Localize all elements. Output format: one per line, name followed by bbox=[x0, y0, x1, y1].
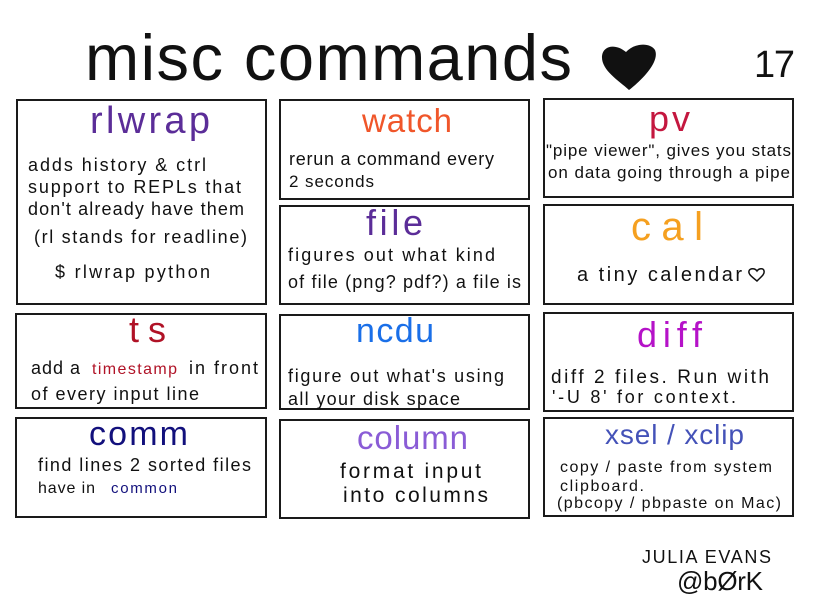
text: comm description: have in bbox=[38, 480, 95, 497]
text: xsel description bbox=[557, 459, 781, 512]
panel: watch bbox=[280, 100, 529, 199]
credit: author: JULIA EVANS bbox=[642, 547, 771, 567]
heading: ts: ts bbox=[129, 309, 166, 350]
title: misc commands bbox=[85, 21, 572, 94]
heading: column: column bbox=[357, 419, 468, 456]
panel: pv bbox=[544, 98, 793, 197]
panel: diff bbox=[544, 313, 793, 411]
credit: author bbox=[642, 547, 771, 594]
heading: xsel / xclip: xsel / xclip bbox=[605, 419, 744, 450]
text: ncdu description: figure out what's using bbox=[288, 366, 504, 386]
heading: rlwrap: rlwrap bbox=[90, 100, 210, 142]
text: ts description: in front bbox=[189, 358, 258, 378]
text: comm description bbox=[38, 455, 251, 497]
text: ncdu description bbox=[288, 366, 504, 409]
text: diff description: '-U 8' for context. bbox=[552, 387, 736, 407]
text: file description bbox=[288, 245, 521, 292]
text: ts description: add a bbox=[31, 358, 81, 378]
panel: column bbox=[280, 419, 529, 518]
heading: watch: watch bbox=[361, 102, 452, 139]
text: cal description: a tiny calendar bbox=[577, 264, 742, 286]
text: watch description: rerun a command every bbox=[289, 149, 494, 169]
text: watch description bbox=[289, 149, 494, 191]
page number: 17 bbox=[754, 44, 795, 86]
panel: file bbox=[280, 202, 529, 304]
icon: small heart bbox=[749, 269, 764, 281]
panel: cal bbox=[544, 205, 793, 304]
text: pv description bbox=[546, 141, 791, 182]
text: file description: figures out what kind bbox=[288, 245, 495, 265]
panel: rlwrap bbox=[17, 100, 266, 304]
text: rlwrap description bbox=[28, 155, 247, 282]
heading: ncdu: ncdu bbox=[356, 312, 434, 350]
text: diff description bbox=[551, 367, 769, 407]
text: xsel description: copy / paste from system bbox=[560, 459, 772, 476]
heading: comm: comm bbox=[89, 415, 188, 453]
heading: pv: pv bbox=[649, 98, 690, 139]
text: file description: of file (png? pdf?) a file is bbox=[288, 272, 521, 292]
text: rlwrap description: (rl stands for readline) bbox=[34, 227, 247, 247]
text: column description: into columns bbox=[343, 484, 488, 507]
panel: ts bbox=[16, 309, 266, 408]
text: rlwrap description: don't already have them bbox=[28, 199, 244, 219]
text: ts description: of every input line bbox=[31, 384, 199, 404]
text: watch description: 2 seconds bbox=[289, 172, 374, 191]
text: comm description: find lines 2 sorted files bbox=[38, 455, 251, 475]
heading: file: file bbox=[366, 202, 423, 243]
text: xsel description: (pbcopy / pbpaste on Mac) bbox=[557, 495, 781, 512]
text: ncdu description: all your disk space bbox=[288, 389, 460, 409]
text: diff description: diff 2 files. Run with bbox=[551, 367, 769, 388]
text: pv description: "pipe viewer", gives you stats bbox=[546, 141, 791, 160]
panel: comm bbox=[16, 415, 266, 517]
heading: cal: cal bbox=[631, 205, 703, 249]
panel: ncdu bbox=[280, 312, 529, 409]
icon: heart bbox=[602, 45, 656, 90]
text: ts description: timestamp bbox=[92, 361, 177, 378]
text: column description bbox=[340, 460, 488, 507]
text: rlwrap description: $ rlwrap python bbox=[55, 262, 210, 282]
heading: diff: diff bbox=[637, 314, 703, 355]
text: pv description: on data going through a pipe bbox=[548, 163, 790, 182]
text: xsel description: clipboard. bbox=[560, 478, 644, 495]
text: rlwrap description: support to REPLs that bbox=[28, 177, 241, 197]
panel: xsel / xclip bbox=[544, 418, 793, 516]
text: rlwrap description: adds history & ctrl bbox=[28, 155, 206, 175]
text: comm description: common bbox=[111, 480, 177, 497]
text: ts description bbox=[31, 358, 258, 404]
text: column description: format input bbox=[340, 460, 481, 483]
